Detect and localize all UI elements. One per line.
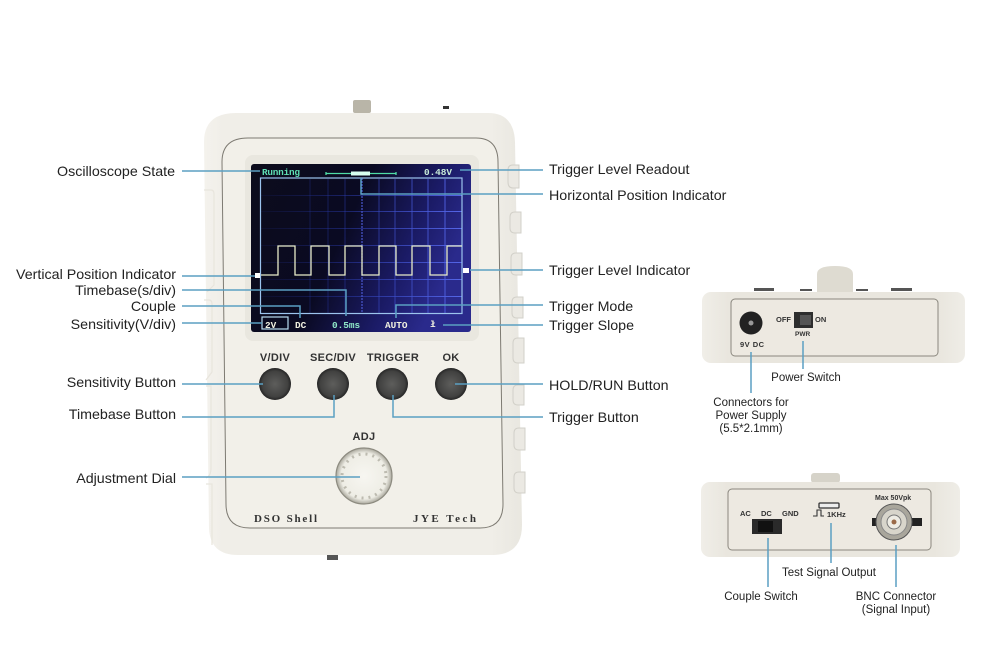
label: Trigger Level Readout: Trigger Level Readout: [549, 162, 690, 178]
top connector stub: [353, 100, 371, 113]
max voltage label: Max 50Vpk: [875, 495, 911, 502]
panel: input side view: GND: [782, 509, 799, 518]
label: Trigger Level Indicator: Trigger Level Indicator: [549, 263, 691, 279]
label: Sensitivity Button: Sensitivity Button: [67, 375, 176, 391]
screen: AUTO: [385, 320, 408, 331]
left side grips: [204, 190, 214, 545]
panel: rear power view: [702, 266, 965, 363]
leader lines: [182, 170, 896, 587]
screen readouts: Running: [262, 167, 300, 178]
label: Trigger Slope: Trigger Slope: [549, 318, 634, 334]
label: Oscilloscope State: Oscilloscope State: [57, 164, 175, 180]
couple switch labels: AC: [740, 509, 751, 518]
knob label: ADJ: [353, 431, 375, 443]
BNC connector: [872, 504, 922, 540]
label: Trigger Button: Trigger Button: [549, 410, 639, 426]
label: Sensitivity: Sensitivity(V/div): [71, 317, 176, 333]
panel: oscilloscope front view: JYE Tech: [413, 513, 476, 525]
label: Adjustment Dial: Adjustment Dial: [76, 471, 176, 487]
screen: 0.48V: [424, 167, 452, 178]
panel: oscilloscope front view: TRIGGER: [367, 352, 419, 364]
label: Couple: Couple: [131, 299, 176, 315]
screen: 0.5ms: [332, 320, 361, 331]
label: Timebase Button: Timebase Button: [69, 407, 176, 423]
label: Vertical Position Indicator: Vertical Position Indicator: [16, 267, 176, 283]
inner faceplate: [222, 138, 503, 528]
label: Timebase: Timebase(s/div): [75, 283, 176, 299]
label: Power Switch: Power Switch: [771, 372, 841, 384]
square wave trace: [261, 246, 462, 275]
label: Test Signal Output: Test Signal Output: [782, 567, 877, 579]
bottom switch stub: [327, 555, 338, 560]
panel: rear power view: ON: [815, 315, 826, 324]
panel: rear power view: PWR: [795, 331, 810, 338]
test signal label: [813, 510, 846, 519]
label: Horizontal Position Indicator: Horizontal Position Indicator: [549, 188, 727, 204]
panel: oscilloscope front view: SEC/DIV: [310, 352, 356, 364]
screen: [251, 164, 471, 332]
buttons: [259, 368, 291, 400]
label: BNC Connector: BNC Connector: [856, 591, 936, 603]
panel: oscilloscope front view: OK: [442, 352, 460, 364]
label: Trigger Mode: Trigger Mode: [549, 299, 633, 315]
side body: [701, 482, 960, 557]
screen: 2V: [265, 320, 277, 331]
side inset panel: [728, 489, 931, 550]
jack label: 9V DC: [740, 340, 765, 349]
label: Connectors for Power Supply: Connectors for: [713, 397, 789, 409]
switch labels: OFF: [776, 315, 791, 324]
adjustment knob: [336, 448, 392, 504]
dial top: [817, 266, 853, 293]
screen: ł: [430, 319, 436, 330]
screen grid: [310, 179, 445, 313]
label: Connectors for Power Supply: Power Supply: [716, 410, 787, 422]
couple switch: [752, 519, 782, 534]
button labels: V/DIV: [260, 352, 290, 364]
panel: input side view: [701, 473, 960, 557]
screen: DC: [295, 320, 307, 331]
device body: [204, 113, 522, 555]
test signal terminal: [819, 503, 839, 508]
label: BNC Connector: (Signal Input): [862, 604, 930, 616]
label: Couple Switch: Couple Switch: [724, 591, 798, 603]
right side grips: [508, 165, 525, 493]
label: Connectors for Power Supply: (5.5*2.1mm): [719, 423, 783, 435]
power jack: [740, 312, 762, 334]
panel: oscilloscope front view: [204, 100, 525, 560]
screen bezel: [245, 155, 479, 341]
rear body: [702, 292, 965, 363]
rear inset panel: [731, 299, 938, 356]
brand text: DSO Shell: [254, 513, 317, 525]
dial top: [811, 473, 840, 483]
screen frame: [260, 178, 462, 314]
label: HOLD/RUN Button: HOLD/RUN Button: [549, 378, 669, 394]
panel: input side view: DC: [761, 509, 772, 518]
test signal label: 1KHz: [827, 510, 846, 519]
power switch: [794, 312, 813, 328]
